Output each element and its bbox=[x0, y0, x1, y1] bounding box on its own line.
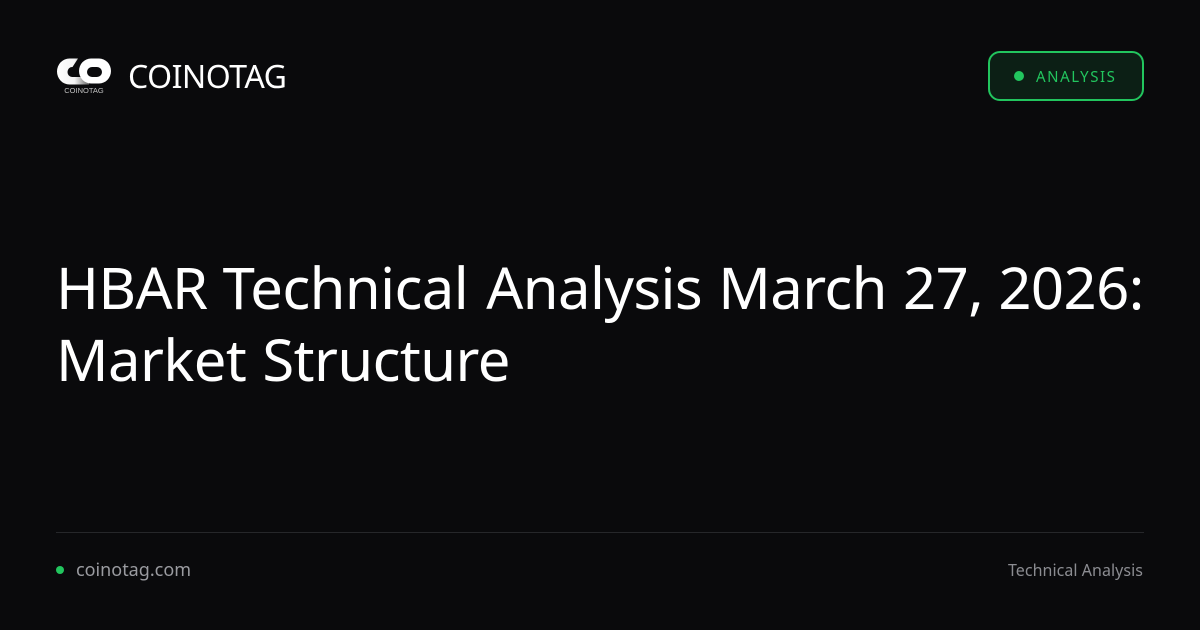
badge label: ANALYSIS bbox=[1036, 67, 1116, 87]
badge: analysis bbox=[988, 51, 1144, 101]
footer site bbox=[56, 558, 191, 582]
title: Market Structure bbox=[56, 319, 510, 398]
divider line bbox=[56, 532, 1144, 533]
icon: coinotag logo: COINOTAG bbox=[64, 86, 104, 95]
badge dot bbox=[1014, 71, 1024, 81]
footer url: coinotag.com bbox=[76, 558, 191, 582]
brand name: COINOTAG bbox=[128, 55, 286, 98]
icon: coinotag logo bbox=[57, 58, 111, 95]
title: HBAR Technical Analysis March 27, 2026: bbox=[56, 247, 1144, 326]
footer dot bbox=[56, 566, 64, 574]
footer category: Technical Analysis bbox=[1008, 559, 1143, 581]
title bbox=[56, 247, 1144, 398]
